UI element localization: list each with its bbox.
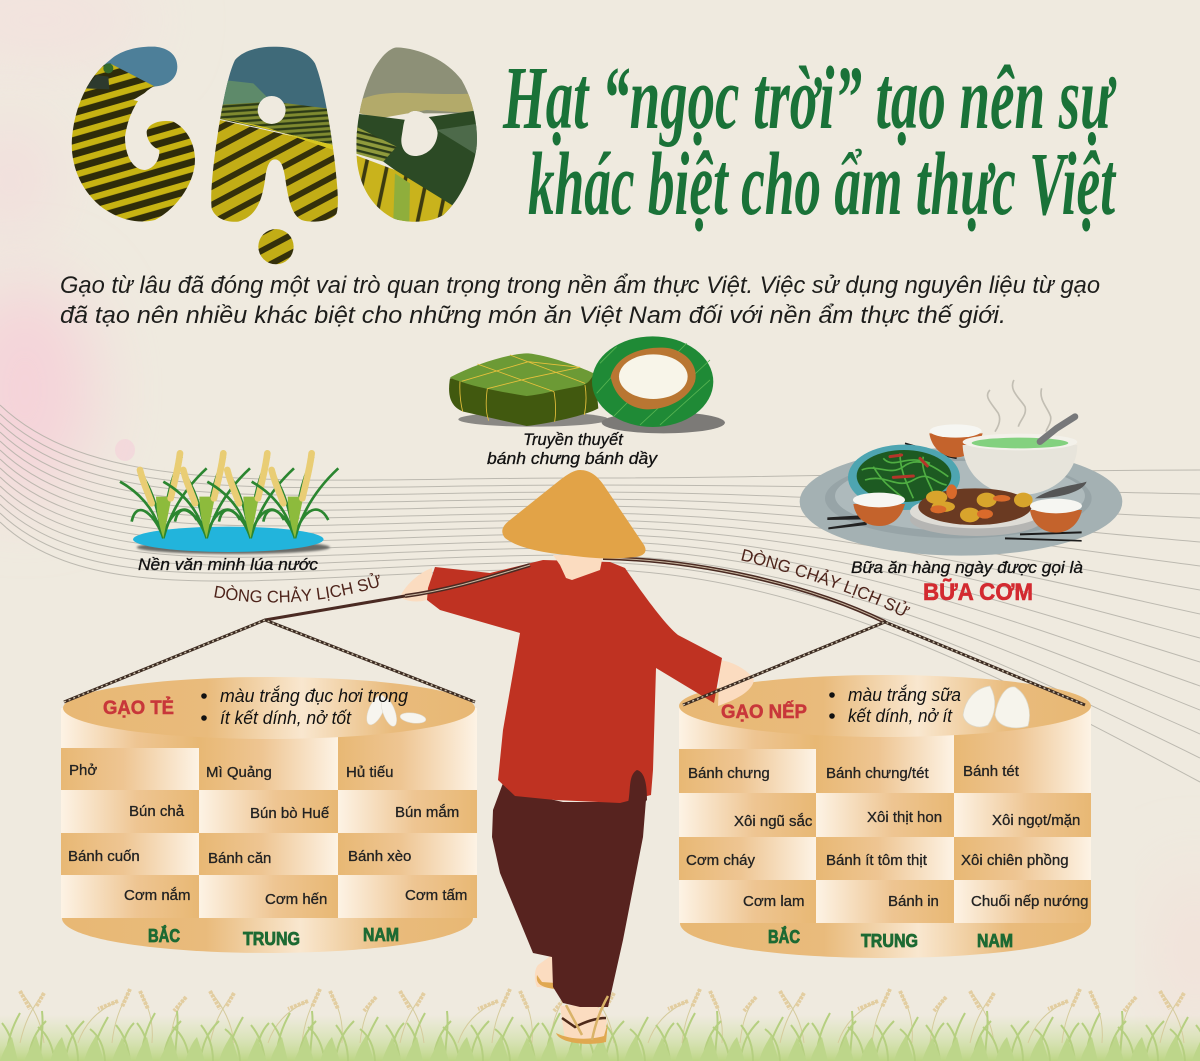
dishes: Bánh chưng/tét — [826, 765, 929, 782]
flow label left: DÒNG CHẢY LỊCH SỬ — [214, 573, 380, 603]
caption: banh chung — [487, 431, 659, 468]
properties: kết dính, nở ít — [848, 706, 953, 726]
intro text — [60, 272, 1100, 329]
dishes — [686, 763, 1088, 910]
letter A — [211, 46, 338, 222]
panel: gạo tẻ basket — [61, 677, 477, 953]
main plate — [910, 484, 1043, 536]
dishes: Bánh căn — [208, 850, 271, 867]
regions: BẮC — [148, 925, 180, 946]
trouser waist strip — [628, 770, 647, 803]
trousers — [492, 770, 647, 1007]
regions — [768, 926, 1013, 951]
properties: màu trắng sữa — [848, 685, 961, 705]
basket body — [679, 675, 1091, 958]
properties — [829, 685, 961, 726]
carrying pole — [265, 558, 885, 622]
flow label right: DÒNG CHẢY LỊCH SỬ — [741, 549, 910, 616]
caption: daily meal: BỮA CƠM — [923, 578, 1033, 606]
red shirt — [427, 560, 722, 803]
dishes: Cơm hến — [265, 891, 327, 908]
icon: rice paddy — [120, 453, 338, 554]
rice bowl back — [929, 424, 983, 457]
dishes — [68, 762, 467, 908]
sticky rice grains — [963, 686, 1029, 728]
left hand — [400, 568, 432, 602]
properties: màu trắng đục hơi trong — [220, 686, 408, 706]
dishes: Bánh tét — [963, 763, 1020, 780]
caption: banh chung: bánh chưng bánh dầy — [487, 450, 659, 468]
dishes: Cơm lam — [743, 893, 805, 910]
soup bowl — [963, 417, 1087, 498]
dishes: Xôi ngọt/mặn — [992, 812, 1080, 829]
regions: NAM — [977, 931, 1013, 951]
dishes: Bánh ít tôm thịt — [826, 852, 928, 869]
ropes — [64, 620, 1085, 705]
neck — [553, 555, 603, 580]
heading: GẠO NẾP — [721, 701, 807, 723]
panel: gạo nếp basket — [679, 675, 1091, 958]
letter O — [356, 48, 477, 222]
title — [502, 49, 1117, 234]
flowing history lines — [0, 405, 1200, 782]
green vegetables plate — [848, 445, 960, 510]
dishes: Xôi thịt hon — [867, 809, 942, 826]
icon: daily meal tray — [800, 380, 1122, 556]
dishes: Bánh cuốn — [68, 848, 140, 865]
dishes: Bánh chưng — [688, 765, 770, 782]
dishes: Mì Quảng — [206, 764, 272, 781]
dishes: Hủ tiếu — [346, 764, 394, 781]
dishes: Cơm cháy — [686, 852, 756, 869]
dishes: Bún bò Huế — [250, 805, 330, 822]
basket body — [61, 677, 477, 953]
dot under A — [258, 229, 294, 264]
rice grains — [363, 693, 427, 728]
letter G — [70, 43, 200, 227]
icon: banh chung and banh day — [449, 336, 725, 433]
properties: ít kết dính, nở tốt — [220, 708, 352, 728]
rice bowl left — [827, 493, 905, 529]
back foot — [535, 955, 556, 988]
regions: BẮC — [768, 926, 800, 947]
regions — [148, 925, 399, 949]
caption: rice civilisation: Nền văn minh lúa nước — [138, 556, 319, 574]
intro text: Gạo từ lâu đã đóng một vai trò quan trọng trong nền ẩm thực Việt. Việc sử dụng nguyên liệu từ gạo — [60, 272, 1100, 299]
dishes: Chuối nếp nướng — [971, 893, 1088, 910]
dishes: Bún chả — [129, 803, 185, 820]
dishes: Bánh xèo — [348, 848, 411, 865]
regions: TRUNG — [861, 931, 918, 951]
dishes: Bún mắm — [395, 804, 459, 821]
heading: GẠO TẺ — [103, 697, 174, 719]
dishes: Cơm nắm — [124, 887, 191, 904]
front foot — [556, 1004, 608, 1044]
wheat stalks in front of foot — [566, 996, 608, 1040]
dishes: Bánh in — [888, 893, 939, 910]
right hand — [718, 660, 754, 706]
grass and wheat foreground — [0, 985, 1200, 1061]
caption: daily meal: Bữa ăn hàng ngày được gọi là — [851, 559, 1083, 577]
caption: daily meal — [851, 559, 1083, 606]
dishes: Cơm tấm — [405, 887, 467, 904]
figure: farmer carrying the pole — [265, 470, 885, 1044]
intro text: đã tạo nên nhiều khác biệt cho những món ăn Việt Nam đối với nền ẩm thực thế giới. — [60, 302, 1006, 329]
caption: banh chung: Truyền thuyết — [523, 431, 624, 449]
rice bowl right — [1005, 499, 1082, 542]
regions: TRUNG — [243, 929, 300, 949]
word GẠO filled with rice terraces — [70, 43, 480, 264]
dishes: Xôi ngũ sắc — [734, 813, 813, 830]
properties — [201, 686, 408, 728]
dishes: Xôi chiên phồng — [961, 852, 1069, 869]
regions: NAM — [363, 925, 399, 945]
conical hat — [502, 470, 646, 558]
dishes: Phở — [69, 762, 97, 779]
